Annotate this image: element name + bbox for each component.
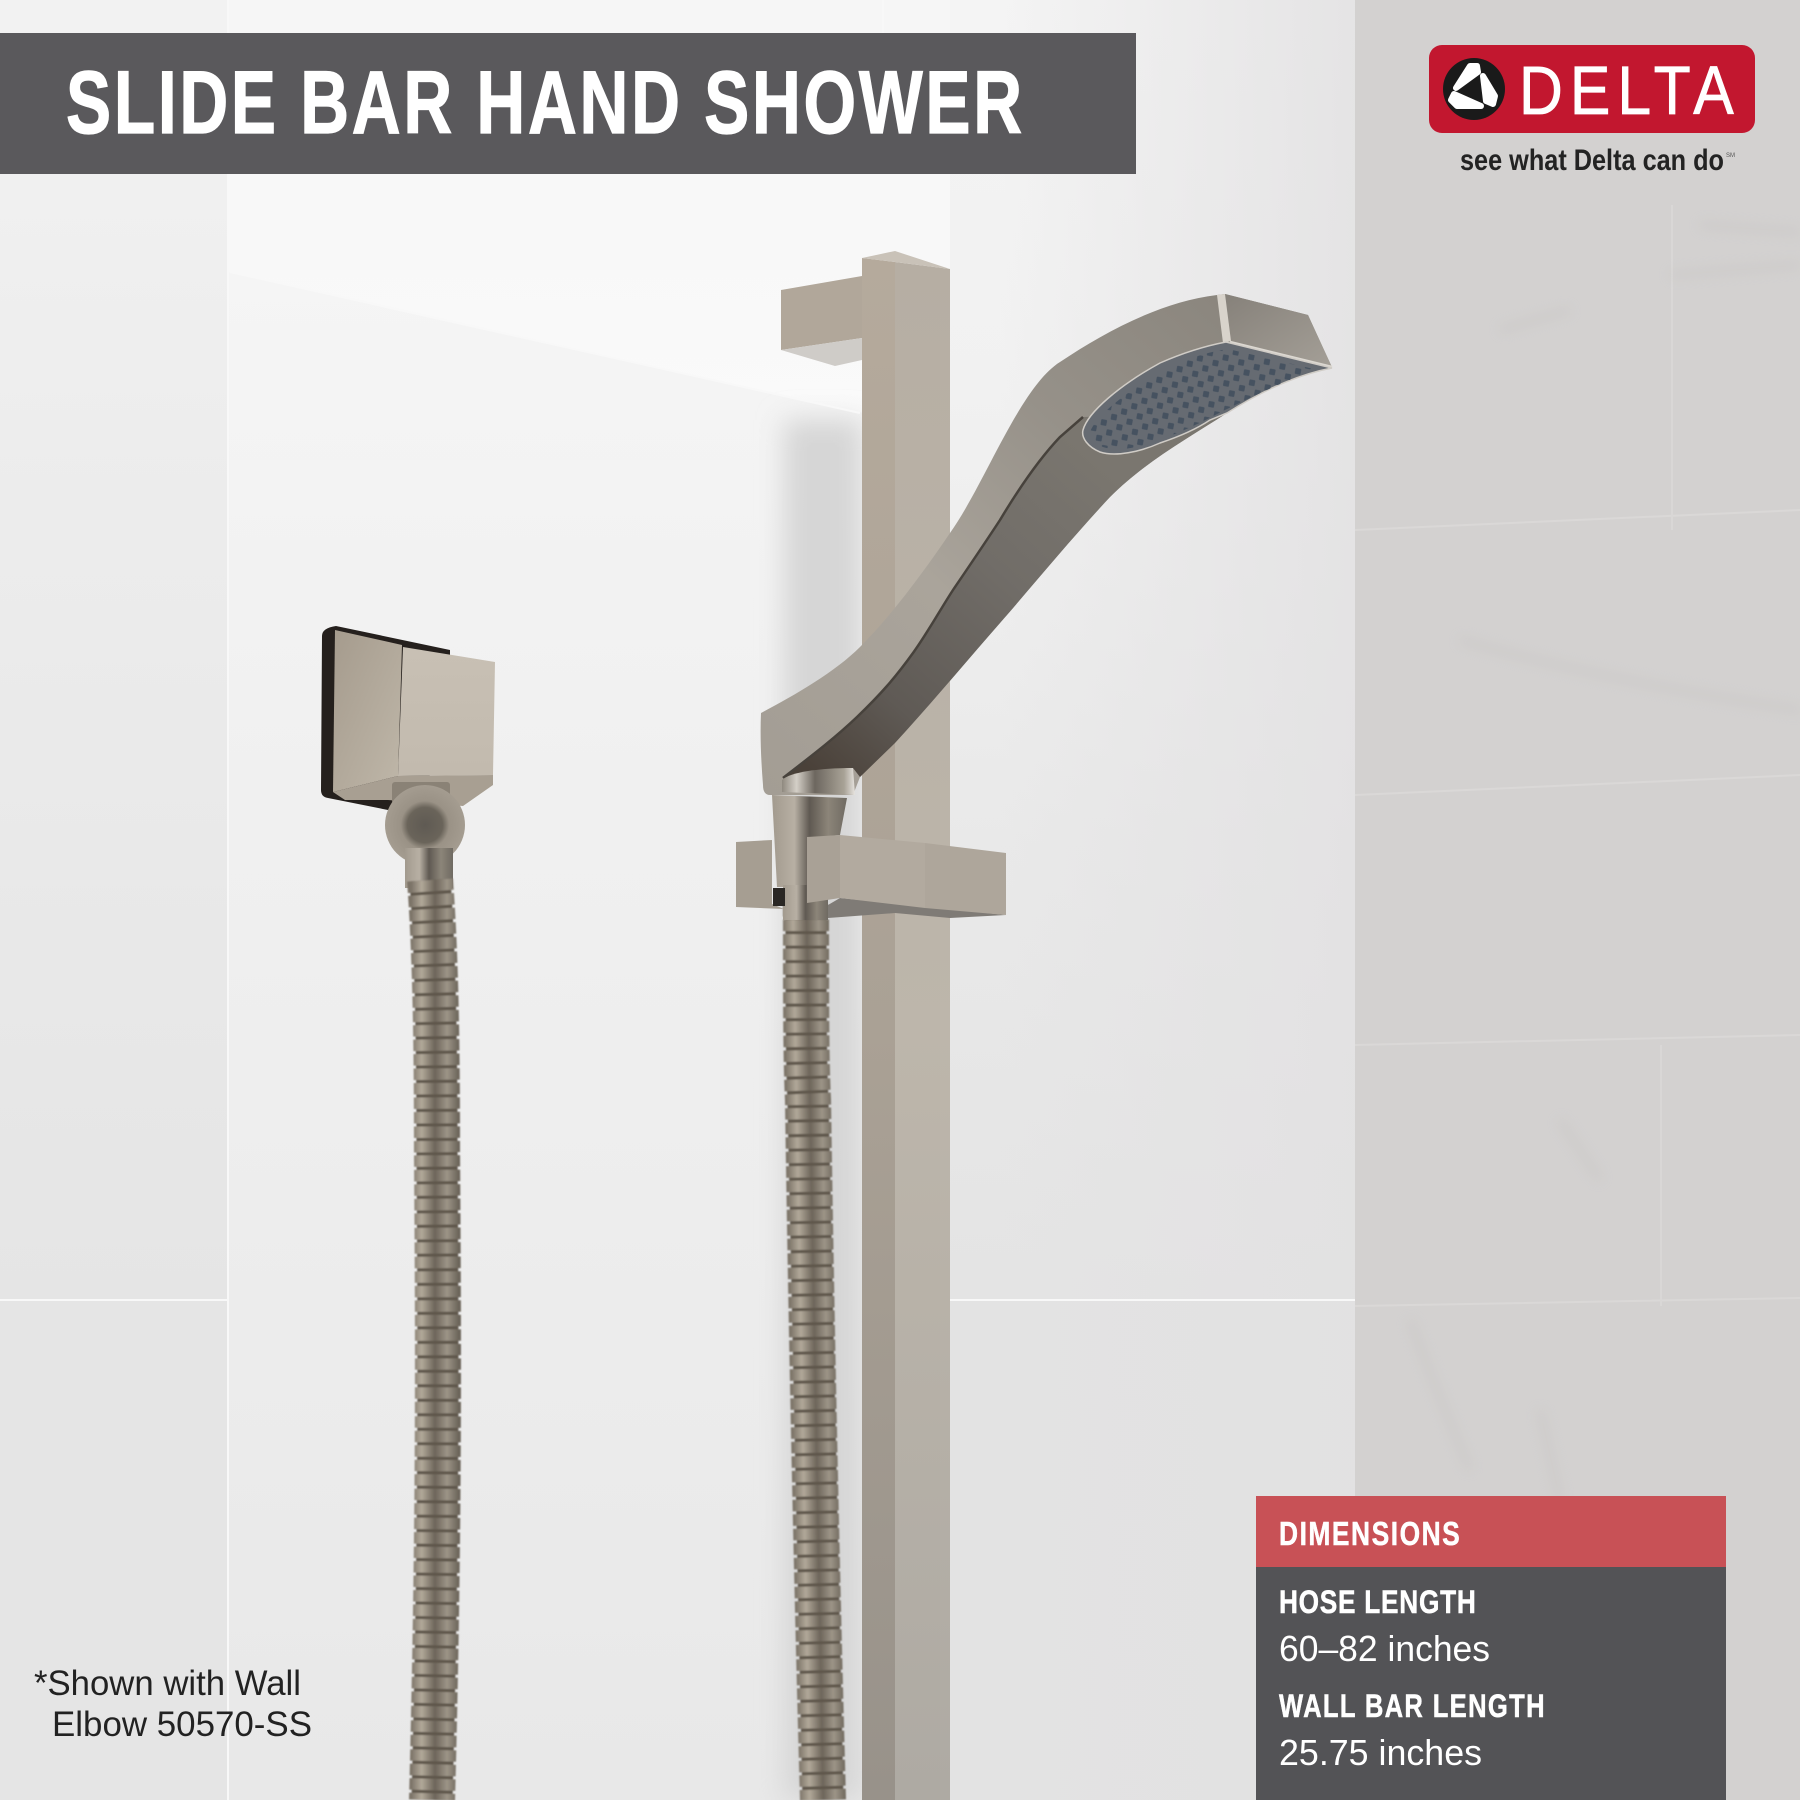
- swivel collar: [782, 768, 855, 795]
- title banner: [0, 33, 1136, 174]
- holder underside: [828, 898, 1006, 918]
- spray face: [1080, 340, 1335, 455]
- tagline: SM: [1726, 153, 1735, 159]
- holder left face: [807, 835, 840, 903]
- wall elbow fitting: [321, 626, 495, 888]
- hose length: [1279, 1586, 1490, 1669]
- panel header: DIMENSIONS: [1279, 1516, 1460, 1553]
- elbow right face: [398, 647, 495, 776]
- footnote: Elbow 50570-SS: [52, 1705, 312, 1744]
- elbow tube: [405, 848, 453, 888]
- footnote: [34, 1664, 312, 1744]
- wall bar length: WALL BAR LENGTH: [1279, 1689, 1545, 1725]
- bar right face: [895, 262, 950, 1800]
- spray nozzles: [1090, 350, 1311, 448]
- hand shower head: [761, 294, 1335, 795]
- holder cylinder: [772, 795, 847, 887]
- elbow backing plate: [321, 626, 450, 812]
- holder right face: [925, 843, 1006, 915]
- slide holder block: [736, 795, 1006, 920]
- wall seam lines: [0, 0, 1355, 1800]
- logo wordmark: DELTA: [1519, 51, 1734, 129]
- holder left tab: [736, 840, 784, 909]
- handle underside: [783, 413, 1227, 778]
- title text: SLIDE BAR HAND SHOWER: [66, 52, 1022, 152]
- footnote: *Shown with Wall: [34, 1664, 301, 1703]
- holder middle face: [840, 835, 925, 908]
- icon: Delta triangle mark: [1443, 58, 1505, 120]
- bar left face: [862, 258, 895, 1800]
- plate highlights: [1217, 294, 1332, 367]
- hose length: 60–82 inches: [1279, 1628, 1490, 1669]
- bar top cap: [862, 251, 950, 269]
- elbow swivel ball: [385, 785, 465, 865]
- head top plate: [1225, 294, 1332, 367]
- right wall tile seams and veining: [1355, 205, 1800, 1500]
- handle upper surface: [761, 294, 1332, 795]
- holder lower tube: [783, 885, 828, 920]
- hose to slide holder: [806, 905, 823, 1800]
- wall bar length: [1279, 1689, 1545, 1773]
- holder shadow gap: [773, 888, 785, 906]
- hose length: HOSE LENGTH: [1279, 1586, 1476, 1621]
- elbow underside: [333, 775, 493, 806]
- wall bar length: 25.75 inches: [1279, 1732, 1482, 1773]
- tagline: see what Delta can do: [1460, 144, 1724, 177]
- panel body: [1256, 1567, 1726, 1800]
- elbow left face: [333, 630, 402, 792]
- panel header: [1256, 1496, 1726, 1567]
- Delta logo: [1429, 45, 1755, 177]
- upper wall bracket: [781, 276, 862, 366]
- panel: dimensions: [1256, 1496, 1726, 1800]
- elbow threaded neck: [392, 782, 450, 804]
- ridge line: [783, 417, 1083, 778]
- hose to wall elbow: [430, 880, 438, 1800]
- slide bar: [781, 251, 950, 1800]
